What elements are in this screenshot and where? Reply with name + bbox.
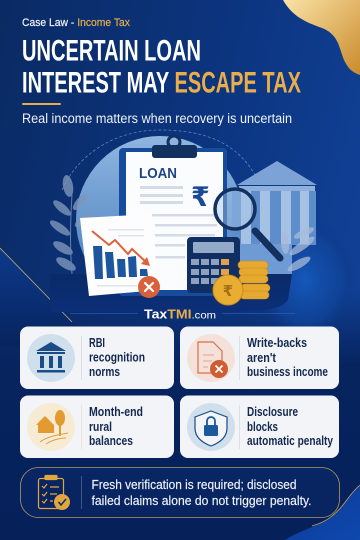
calculator bbox=[187, 237, 240, 293]
coins: ₹ bbox=[223, 282, 233, 300]
card text: norms bbox=[89, 365, 120, 379]
card text: rural bbox=[89, 420, 112, 434]
card text: Month-end bbox=[89, 405, 143, 419]
card text: blocks bbox=[247, 420, 278, 434]
card text: automatic penalty bbox=[247, 434, 333, 448]
chart paper bbox=[80, 214, 158, 296]
bottom right swoosh bbox=[285, 485, 360, 540]
clipboard: ₹ bbox=[191, 182, 210, 213]
eyebrow: Case Law - Income Tax bbox=[22, 17, 130, 29]
card text: Disclosure bbox=[247, 405, 298, 419]
icon: rural house bbox=[27, 403, 75, 451]
icon: shield lock bbox=[187, 403, 235, 451]
callout bbox=[20, 468, 340, 518]
card text: balances bbox=[89, 434, 133, 448]
bank building bbox=[232, 161, 317, 274]
error badge bbox=[138, 276, 160, 298]
title bbox=[22, 34, 301, 100]
card: write-backs bbox=[180, 326, 339, 389]
floor bbox=[50, 274, 292, 312]
title rule bbox=[22, 103, 61, 105]
leaves left bbox=[48, 174, 93, 274]
subtitle: Real income matters when recovery is uncertain bbox=[22, 111, 292, 126]
dashed arc bbox=[62, 130, 255, 190]
left diagonal band bbox=[0, 248, 96, 346]
clipboard: LOAN bbox=[139, 166, 177, 182]
card text: Write-backs bbox=[247, 336, 307, 350]
callout text: Fresh verification is required; disclosed bbox=[92, 478, 297, 492]
clipboard bbox=[119, 136, 227, 296]
icon: checklist bbox=[38, 476, 70, 510]
card text: RBI bbox=[89, 336, 105, 350]
right glow bbox=[255, 218, 355, 342]
leaves right bbox=[280, 225, 317, 274]
title: INTEREST MAY ESCAPE TAX bbox=[22, 66, 301, 100]
illustration bbox=[48, 130, 317, 312]
card text: aren't bbox=[247, 351, 277, 365]
card: disclosure bbox=[180, 396, 339, 458]
title: UNCERTAIN LOAN bbox=[22, 34, 201, 68]
logo: TaxTMI .com bbox=[144, 308, 216, 322]
card text: recognition bbox=[89, 350, 145, 364]
card: rural bbox=[20, 396, 174, 458]
icon: document error bbox=[187, 334, 235, 382]
card text: business income bbox=[247, 365, 328, 379]
magnifier bbox=[215, 189, 280, 258]
backdrop circle bbox=[76, 136, 244, 304]
icon: bank bbox=[27, 334, 75, 382]
coins bbox=[213, 261, 270, 305]
callout text: failed claims alone do not trigger penalty. bbox=[92, 494, 312, 508]
card: RBI bbox=[20, 326, 174, 389]
gold corner shape bbox=[283, 0, 360, 75]
